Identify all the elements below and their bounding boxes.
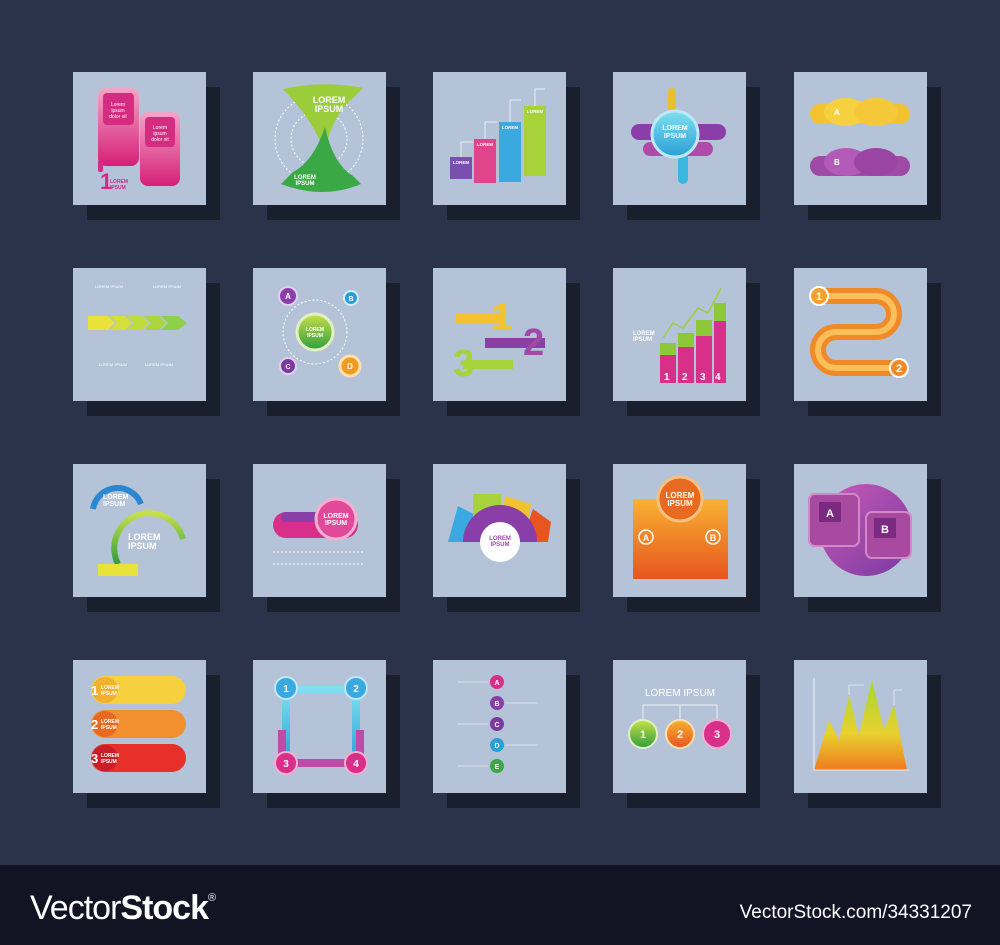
panel: chevron arrow: LOREM IPSUM [95,284,123,289]
panel: pink bars [73,72,206,205]
panel: growth chart: 4 [715,372,721,383]
panel: ABCD circles: LOREM [306,327,324,333]
panel: rising bars: LOREM [527,109,543,114]
panel: growth chart: IPSUM [633,337,652,343]
panel: purple A B: A [826,508,834,520]
panel: numbers 1 2 3: 2 [523,322,544,364]
panel: fan: LOREM [489,536,511,542]
panel: numbers 1 2 3 [433,268,566,401]
panel: stacked capsules: 3 [91,751,98,766]
panel: orange S path: 2 [896,363,902,375]
panel: numbers 1 2 3: 1 [491,297,512,339]
panel: orange S path [794,268,927,401]
panel: stacked capsules: 2 [91,717,98,732]
panel: growth chart: LOREM [633,331,655,337]
panel: rings: IPSUM [103,501,125,508]
panel: pink bars: ipsum [111,108,125,114]
panel: three circles: 1 [640,729,646,741]
panel: pink bars: 1 [100,169,112,194]
panel: A B ovals [794,72,927,205]
panel: growth chart [613,268,746,401]
panel: purple A B [794,464,927,597]
panel: green hourglass: IPSUM [315,104,343,114]
panel: blob circle [613,72,746,205]
panel: orange box: A [643,533,650,543]
panel: pink bars: ipsum [153,131,167,137]
panel: A B ovals: A [834,108,840,117]
panel: purple A B: B [881,524,889,536]
panel: pink bars: Lorem [111,102,125,108]
panel: ABCD circles: C [285,364,291,371]
panel: green hourglass: LOREM [313,95,345,105]
panel: growth chart: 3 [700,372,706,383]
panel: growth chart: 2 [682,372,688,383]
panel: stacked capsules: IPSUM [101,759,117,765]
footer: VectorStock.com/34331207 [740,902,972,923]
panel: stacked capsules: LOREM [101,685,119,691]
panel: square frame: 1 [283,684,289,695]
panel: A B ovals: B [834,158,840,167]
panel: blob circle: LOREM [662,125,688,132]
panel: ABCD circles: B [348,296,354,303]
panel: ABCD circles: A [285,292,291,301]
panel: vertical list A-E: E [495,764,500,771]
panel: square frame: 3 [283,759,289,770]
panel: vertical list A-E: A [494,680,500,687]
panel: stacked capsules [73,660,206,793]
panel: stacked capsules: LOREM [101,719,119,725]
panel: pink bars: LOREM [110,179,128,185]
panel: pink capsule: IPSUM [325,520,347,527]
panel: ABCD circles [253,268,386,401]
panel: pink bars: Lorem [153,125,167,131]
panel: orange box: B [710,533,717,543]
panel: square frame: 4 [353,759,359,770]
panel: chevron arrow: LOREM IPSUM [153,284,181,289]
panel: orange box: IPSUM [667,499,693,508]
panel: vertical list A-E [433,660,566,793]
panel: pink bars: dolor sit [151,137,169,143]
panel: rings: LOREM [128,532,160,542]
panel: rings [73,464,206,597]
panel: rising bars: LOREM [453,160,469,165]
panel: orange box [613,464,746,597]
panel: three circles: LOREM IPSUM [645,688,715,699]
panel: blob circle: IPSUM [664,133,686,140]
panel: ABCD circles: IPSUM [307,333,323,339]
panel: three circles [613,660,746,793]
panel: vertical list A-E: D [494,743,500,750]
panel: chevron arrow [73,268,206,401]
panel: chevron arrow: LOREM IPSUM [145,362,173,367]
panel: rising bars [433,72,566,205]
panel: stacked capsules: LOREM [101,753,119,759]
panel: pink capsule: LOREM [323,513,349,520]
panel: rings: IPSUM [128,541,157,551]
panel: three circles: 3 [714,729,720,741]
panel: orange S path: 1 [816,291,822,303]
footer [0,865,1000,945]
panel: numbers 1 2 3: 3 [453,343,474,385]
panel: orange box: LOREM [666,491,695,500]
panel: pink capsule [253,464,386,597]
panel: rising bars: LOREM [502,125,518,130]
panel: square frame [253,660,386,793]
footer: ® [208,892,216,904]
panel: pink bars: dolor sit [109,114,127,120]
panel: square frame: 2 [353,684,359,695]
panel: vertical list A-E: B [494,701,500,708]
panel: rings: LOREM [103,494,128,501]
panel: mountain chart [794,660,927,793]
panel: stacked capsules: 1 [91,683,98,698]
panel: stacked capsules: IPSUM [101,691,117,697]
panel: fan: IPSUM [490,542,510,548]
panel: stacked capsules: IPSUM [101,725,117,731]
footer: VectorStock [30,889,208,927]
panel: green hourglass [253,72,386,205]
tile shadows [87,87,941,808]
panel: pink bars: IPSUM [110,185,126,191]
panel: green hourglass: IPSUM [295,181,315,187]
panel: fan [433,464,566,597]
panel: three circles: 2 [677,729,683,741]
panel: rising bars: LOREM [477,142,493,147]
panel: chevron arrow: LOREM IPSUM [99,362,127,367]
panel: ABCD circles: D [347,362,353,371]
panel: growth chart: 1 [664,372,670,383]
panel: vertical list A-E: C [494,722,500,729]
panel: green hourglass: LOREM [294,175,316,181]
